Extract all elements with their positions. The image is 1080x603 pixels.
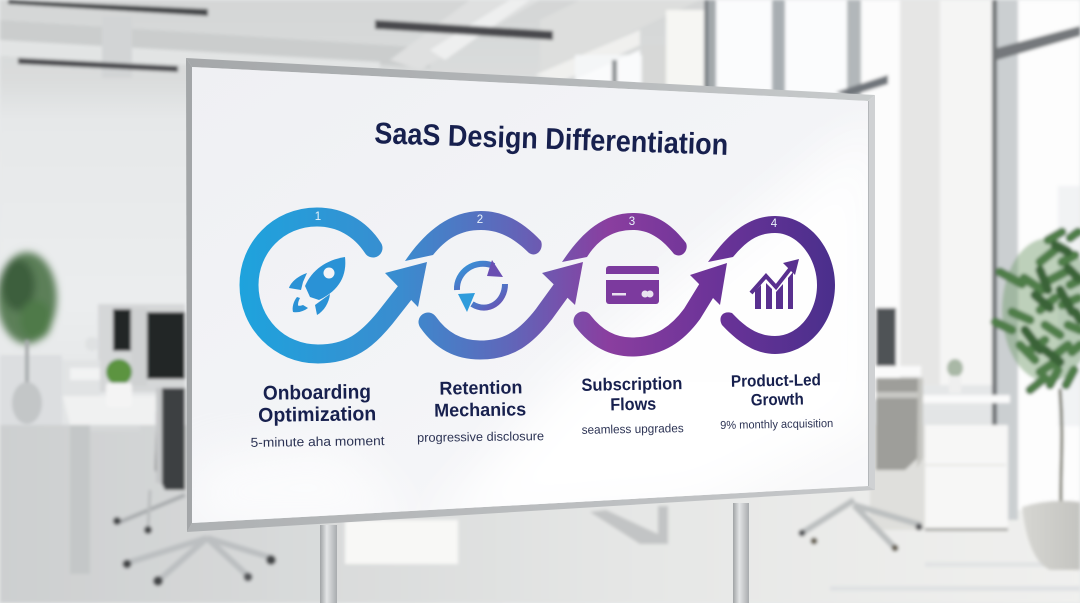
label: retention mechanics: Retention bbox=[439, 376, 523, 399]
step 4 loop bbox=[708, 216, 835, 354]
small potted plant bbox=[106, 359, 132, 385]
right furniture bbox=[876, 308, 896, 366]
icon: renewal arrows bbox=[457, 260, 505, 312]
floor items behind board bbox=[345, 520, 458, 564]
left desks bbox=[62, 360, 100, 396]
label: product-led growth bbox=[719, 371, 833, 432]
window bays bbox=[575, 55, 645, 90]
board surface bbox=[192, 67, 868, 523]
icon: growth chart bbox=[751, 259, 799, 309]
step 3 loop and arrow bbox=[562, 213, 727, 347]
label: retention mechanics bbox=[416, 376, 544, 445]
label: subscription flows bbox=[581, 373, 684, 437]
label: retention mechanics: Mechanics bbox=[434, 398, 526, 421]
left chair bbox=[155, 388, 185, 490]
ceiling lights bbox=[8, 0, 208, 16]
caption: 5-minute aha moment: 5-minute aha moment bbox=[250, 433, 385, 450]
label: onboarding optimization bbox=[250, 381, 385, 450]
flow ribbon bbox=[249, 211, 835, 354]
board frame bbox=[186, 58, 875, 532]
left monitors bbox=[98, 304, 185, 392]
panel: signboard bbox=[186, 58, 880, 540]
step numbers bbox=[315, 211, 778, 230]
step 1 loop and arrow bbox=[249, 217, 427, 354]
left storage and planter bbox=[0, 355, 62, 425]
icon: credit card bbox=[606, 266, 659, 304]
title: SaaS Design Differentiation bbox=[374, 117, 729, 162]
step numbers: 1 bbox=[315, 211, 321, 223]
label: product-led growth: Growth bbox=[751, 391, 804, 409]
right pot bbox=[1022, 501, 1080, 570]
label: product-led growth: Product-Led bbox=[731, 371, 821, 391]
right plant bbox=[995, 232, 1080, 505]
label: subscription flows: Flows bbox=[610, 394, 657, 414]
label: subscription flows: Subscription bbox=[581, 373, 683, 395]
sign stand posts bbox=[320, 503, 749, 603]
icon: rocket bbox=[289, 257, 345, 315]
board highlight bbox=[279, 188, 856, 518]
caption: progressive disclosure: progressive disclosure bbox=[417, 429, 544, 445]
caption: 9% monthly acquisition: 9% monthly acquisition bbox=[720, 418, 833, 432]
step numbers: 2 bbox=[477, 214, 483, 226]
label: onboarding optimization: Onboarding bbox=[263, 381, 371, 405]
caption: seamless upgrades: seamless upgrades bbox=[582, 421, 684, 437]
step numbers: 3 bbox=[629, 216, 635, 228]
step numbers: 4 bbox=[771, 218, 778, 230]
step 2 loop and arrow bbox=[405, 211, 583, 350]
floor streaks bbox=[925, 562, 1045, 567]
ceiling beams bbox=[0, 20, 430, 68]
label: onboarding optimization: Optimization bbox=[258, 403, 376, 427]
